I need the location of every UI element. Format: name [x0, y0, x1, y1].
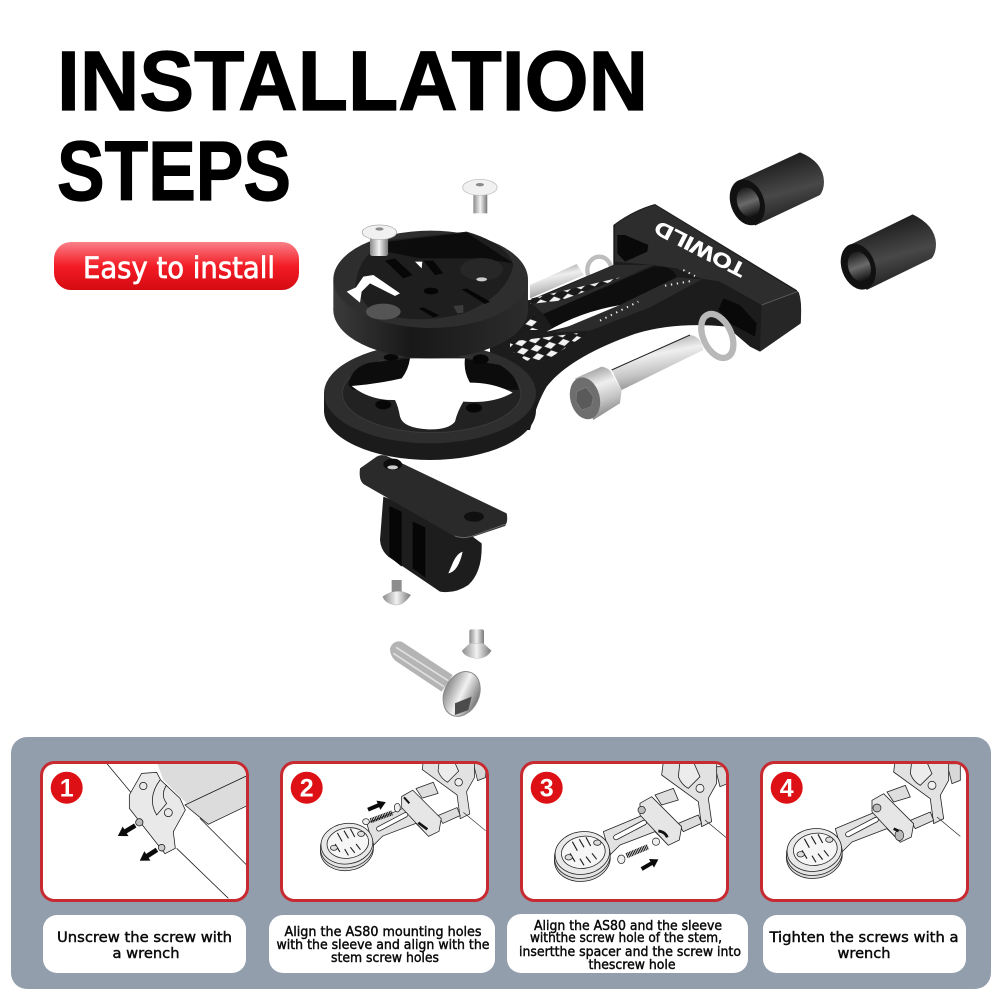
badge: number 1: 1: [60, 774, 74, 802]
hex pin and washer: [565, 309, 740, 423]
title: INSTALLATION: [57, 34, 648, 128]
caption: step 3: Align the AS80 and the sleeve: [534, 919, 722, 934]
caption: step 4: [763, 915, 966, 973]
caption: step 4: Tighten the screws with a: [768, 930, 958, 946]
exploded product illustration: [324, 152, 936, 722]
caption: step 2: [269, 915, 495, 973]
title: [57, 34, 648, 218]
caption: step 2: stem screw holes: [331, 951, 439, 966]
lower disc: [324, 343, 536, 460]
badge: easy to install: [54, 242, 299, 290]
sleeve one: [724, 152, 824, 230]
loose countersunk screw: [462, 629, 491, 658]
caption: step 2: with the sleeve and align with the: [276, 938, 490, 953]
screw above disc: [463, 179, 497, 213]
caption: step 1: Unscrew the screw with: [57, 930, 232, 946]
step 1: [42, 762, 250, 973]
caption: step 1: a wrench: [112, 946, 180, 962]
caption: step 3: [507, 914, 748, 973]
caption: step 2: Align the AS80 mounting holes: [284, 925, 482, 940]
frame: step 4 illustration: [762, 759, 968, 902]
caption: step 4: wrench: [838, 946, 890, 962]
caption: step 3: insertthe spacer and the screw into: [519, 945, 741, 960]
step 4: [762, 759, 968, 973]
badge: number 1: [51, 772, 83, 804]
caption: step 3: thescrew hole: [588, 958, 676, 973]
badge: number 4: [771, 772, 803, 804]
upper disc: [333, 231, 528, 358]
bracket: action camera mount: [360, 455, 507, 592]
caption: step 1: [43, 915, 246, 973]
badge: number 3: 3: [540, 774, 554, 802]
rear washer and pin: [530, 257, 611, 298]
frame: step 3 illustration: [522, 762, 728, 902]
frame: step 2 illustration: [282, 757, 488, 902]
screw on disc: [362, 225, 397, 256]
step 3: [507, 762, 748, 973]
stem arm and T-block: [490, 204, 801, 430]
title: STEPS: [57, 124, 291, 218]
badge: number 2: 2: [300, 774, 314, 802]
badge: number 4: 4: [780, 774, 794, 802]
badge: number 2: [291, 772, 323, 804]
badge: number 3: [531, 772, 563, 804]
badge: easy to install: Easy to install: [83, 251, 275, 285]
caption: step 3: withthe screw hole of the stem,: [530, 931, 722, 946]
brand mark: TOWILD: TOWILD: [651, 216, 750, 280]
small screw under bracket: [383, 580, 411, 605]
step 2: [269, 757, 495, 973]
panel: steps background: [11, 737, 991, 989]
sleeve two: [835, 214, 936, 295]
frame: step 1 illustration: [42, 762, 250, 902]
long threaded bolt: [390, 641, 487, 722]
